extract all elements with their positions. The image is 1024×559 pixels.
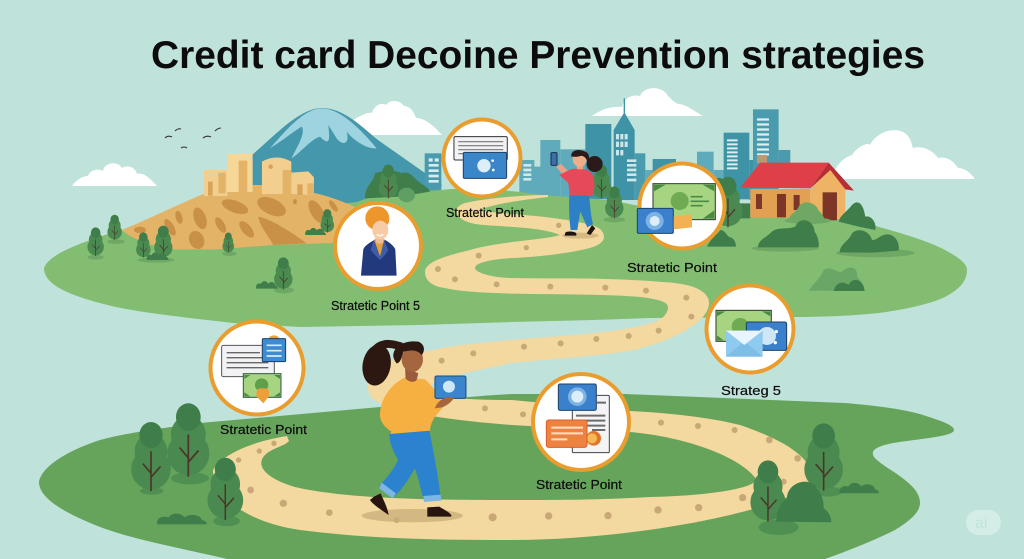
label: strategy 2: Stratetic Point 5 [331, 298, 420, 313]
label: strategy 5: Stratetic Point [536, 477, 622, 492]
bushes and trees on upper island [592, 165, 915, 291]
label: strategy 6: Stratetic Point [220, 422, 307, 437]
trees on left of upper island [87, 209, 334, 293]
birds [165, 128, 221, 148]
strategy 2: business person [335, 203, 421, 289]
strategy 5: card, document and payment [533, 374, 629, 470]
trees on lower island right [750, 423, 879, 535]
cloud: centre [353, 101, 442, 135]
island: upper green [44, 189, 967, 327]
cloud: right [832, 130, 975, 179]
strategy 3: banknote and card [637, 164, 724, 248]
cloud: above city [592, 88, 703, 116]
label: strategy 3: Stratetic Point [627, 260, 717, 275]
label: strategy 4: Strateg 5 [721, 383, 781, 398]
city skyline [425, 98, 790, 200]
watermark badge [966, 510, 1001, 535]
strategy 6: document, clipboard and banknote [210, 322, 304, 414]
mountain [236, 108, 442, 210]
person: woman holding card [359, 341, 466, 522]
title: Credit card Decoine Prevention strategies [151, 34, 925, 77]
background trees near hill [365, 165, 430, 202]
house [715, 155, 854, 220]
strategy 4: money, card and envelope [706, 286, 794, 372]
label: strategy 1: Stratetic Point [446, 205, 524, 220]
cloud: left [72, 163, 157, 186]
trees on lower island left [131, 403, 243, 526]
strategy 1: document and card [444, 120, 520, 196]
person: woman with phone [551, 150, 603, 239]
path dots [236, 223, 801, 523]
winding path [213, 195, 812, 540]
watermark badge: ai [975, 515, 987, 532]
hill with village [122, 154, 358, 252]
island: lower green [39, 394, 954, 559]
